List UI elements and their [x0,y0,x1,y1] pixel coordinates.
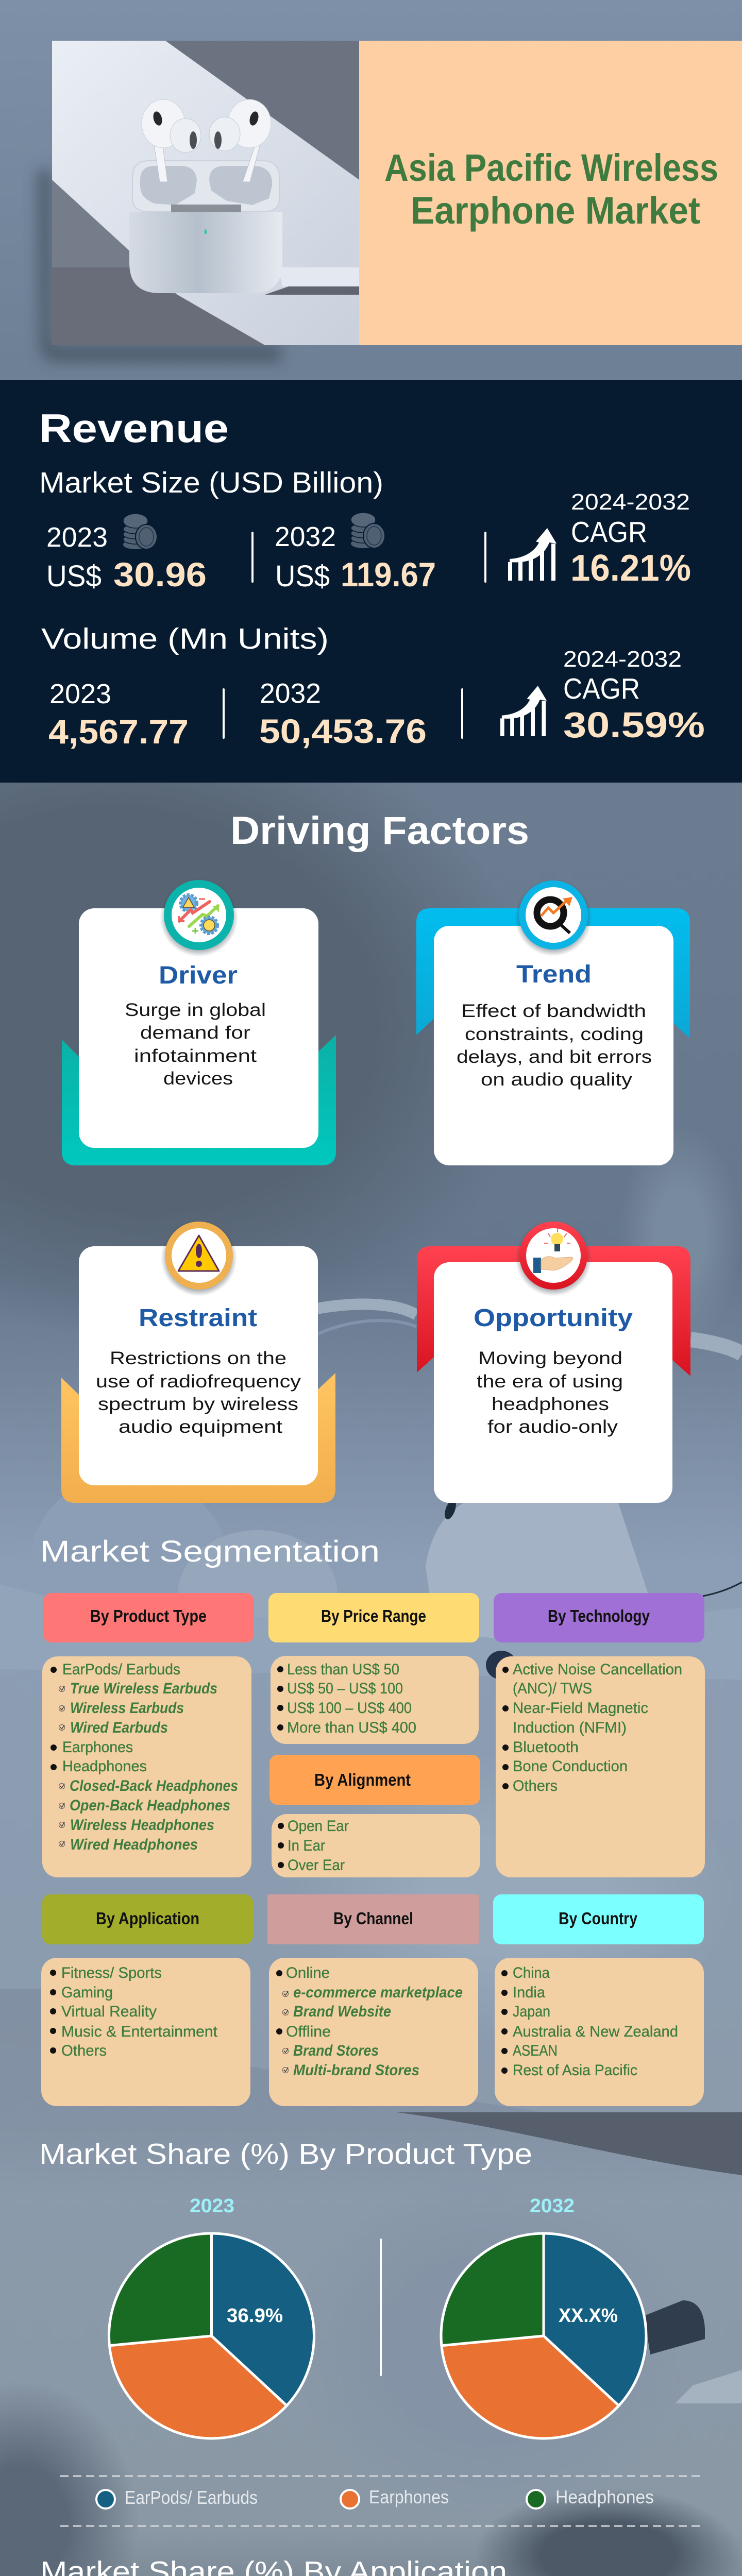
segment: by country: Australia & New Zealand [513,2023,678,2040]
icon: growth arrow volume [500,686,547,736]
icon: growth arrow [508,528,556,581]
segment: by price range [268,1593,479,1744]
card text: use of radiofrequency [96,1371,301,1392]
segment: by alignment [269,1755,480,1877]
segment: by country [493,1894,704,2106]
stat: market size 2032: 119.67 [341,555,436,594]
stat: market size 2032: 2032 [275,521,336,552]
card text: Surge in global [125,1000,266,1020]
stat: volume 2032 [259,678,427,750]
stat: market size 2032 [275,521,436,594]
stat: market size 2023: 2023 [46,522,108,553]
card title: Trend [516,961,592,988]
segment: by channel [267,1894,479,2106]
segment: by country: Rest of Asia Pacific [513,2062,637,2079]
card text: for audio-only [487,1417,618,1437]
segment: by product type: Closed-Back Headphones [70,1777,238,1794]
heading: driving factors: Driving Factors [230,809,529,853]
segment: by product type: Wireless Headphones [70,1817,214,1834]
segment: by product type: True Wireless Earbuds [70,1680,217,1697]
card text: audio equipment [119,1417,282,1437]
card text: Effect of bandwidth [461,1001,646,1021]
segment: by technology: Others [513,1777,558,1794]
card text: infotainment [134,1046,257,1066]
card text: Moving beyond [478,1348,622,1368]
card title: Driver [159,962,238,989]
stat: volume 2023: 4,567.77 [48,713,189,751]
card text [457,1001,652,1090]
stat: volume CAGR: 2024-2032 [563,647,682,672]
stat: market size 2023: US$ [46,560,102,593]
stat: market size 2023 [46,522,207,594]
heading: volume: Volume (Mn Units) [41,622,329,655]
segment: by product type: Wired Headphones [70,1836,198,1853]
icon: warning triangle [178,1235,219,1271]
card text [477,1348,623,1437]
icon: driver gears and arrows [179,895,219,934]
segment: by country: China [513,1964,550,1981]
segment: by product type: Earphones [62,1739,133,1756]
segment: by technology: Bone Conduction [513,1758,628,1775]
stat: market size CAGR: 16.21% [570,548,691,589]
segment: by product type: Open-Back Headphones [70,1797,230,1814]
card text: demand for [140,1023,250,1043]
segment: by product type: By Product Type [90,1606,207,1625]
hero photo: earbuds and charging case [37,41,359,362]
heading: market size: Market Size (USD Billion) [39,466,383,499]
segment: by channel: Brand Stores [293,2042,379,2059]
pie chart 2032 [441,2195,646,2438]
segment: by channel: Multi-brand Stores [293,2062,419,2079]
card: opportunity [417,1220,690,1503]
segment: by channel: e-commerce marketplace [293,1984,463,2001]
segment: by technology: (ANC)/ TWS [513,1680,592,1697]
card text: on audio quality [481,1070,633,1090]
title panel [359,41,742,345]
pie chart 2032: XX.X% [559,2305,618,2327]
card text [125,1000,266,1089]
segment: by product type: Wireless Earbuds [70,1700,184,1717]
card text [96,1348,301,1437]
title [384,146,718,232]
icon: coins 2023 [123,514,157,549]
segment: by technology: By Technology [548,1606,650,1625]
pie chart 2023 [109,2195,314,2438]
segment: by product type: EarPods/ Earbuds [62,1661,180,1678]
segment: by alignment: In Ear [288,1837,325,1854]
card text: delays, and bit errors [457,1047,652,1067]
segment: by alignment: Open Ear [288,1818,349,1835]
segment: by country: ASEAN [513,2042,558,2059]
segment: by price range: More than US$ 400 [287,1719,416,1736]
icon: hand holding light bulb [533,1228,573,1273]
card text: spectrum by wireless [98,1394,298,1414]
segment: by application: By Application [96,1909,199,1928]
segment: by application: Others [61,2042,107,2059]
stat: market size 2032: US$ [275,560,330,593]
card: trend [416,879,690,1165]
stat: volume 2032: 2032 [260,678,321,709]
segment: by application: Music & Entertainment [61,2023,218,2040]
segment: by product type: Headphones [62,1758,147,1775]
card text: constraints, coding [465,1024,644,1044]
segment: by technology: Near-Field Magnetic [513,1700,648,1717]
segment: by price range: Less than US$ 50 [287,1661,399,1678]
segment: by channel: Offline [286,2023,331,2040]
legend: product type: Headphones [555,2486,654,2507]
icon: coins 2032 [351,513,385,548]
stat: volume 2023 [48,679,189,751]
segment: by price range: US$ 50 – US$ 100 [287,1680,403,1697]
pie chart 2023: 2023 [190,2195,234,2217]
segment: by technology: Active Noise Cancellation [513,1661,682,1678]
legend: product type [96,2486,654,2509]
card: driver [62,878,336,1165]
segment: by application: Virtual Reality [61,2003,157,2020]
segment: by channel: By Channel [333,1909,413,1928]
stat: market size 2023: 30.96 [113,555,207,594]
stat: volume CAGR [563,647,705,745]
segment: by application: Fitness/ Sports [61,1964,162,1981]
segment: by technology: Induction (NFMI) [513,1719,627,1736]
card: restraint [61,1220,335,1503]
segment: by technology [494,1593,705,1877]
segment: by product type: Wired Earbuds [70,1719,168,1736]
segment: by country: India [513,1984,545,2001]
segment: by country: By Country [559,1909,638,1928]
segment: by channel: Brand Website [293,2003,391,2020]
stat: volume 2023: 2023 [49,679,111,709]
pie chart 2023: 36.9% [227,2305,283,2327]
card text: headphones [492,1394,609,1414]
segment: by price range: By Price Range [321,1606,426,1625]
card title: Opportunity [474,1304,633,1332]
panel: revenue [0,380,742,783]
card text: devices [163,1069,233,1089]
stat: volume CAGR: 30.59% [563,705,705,745]
card title: Restraint [139,1304,257,1332]
segment: by alignment: By Alignment [314,1770,411,1789]
segment: by product type [42,1593,254,1877]
segment: by technology: Bluetooth [513,1739,579,1756]
segment: by alignment: Over Ear [288,1857,345,1874]
segment: by country: Japan [513,2003,550,2020]
segment: by price range: US$ 100 – US$ 400 [287,1700,412,1717]
segment: by channel: Online [286,1964,330,1981]
segment: by application: Gaming [61,1984,113,2001]
legend: product type: Earphones [369,2486,449,2507]
legend: product type: EarPods/ Earbuds [125,2487,258,2508]
title: Earphone Market [411,189,700,232]
heading: market share by product type: Market Share (%) By Product Type [39,2138,532,2171]
segment: by application [41,1894,253,2106]
stat: volume 2032: 50,453.76 [259,712,427,750]
heading: market segmentation: Market Segmentation [40,1535,380,1568]
card text: the era of using [477,1371,623,1392]
icon: trend magnifier [537,897,572,933]
stat: market size CAGR: CAGR [571,516,647,549]
card text: Restrictions on the [110,1348,286,1368]
heading: revenue: Revenue [39,405,229,451]
stat: market size CAGR [570,489,691,589]
pie chart 2032: 2032 [530,2195,575,2217]
stat: volume CAGR: CAGR [563,672,640,705]
stat: market size CAGR: 2024-2032 [571,489,690,515]
